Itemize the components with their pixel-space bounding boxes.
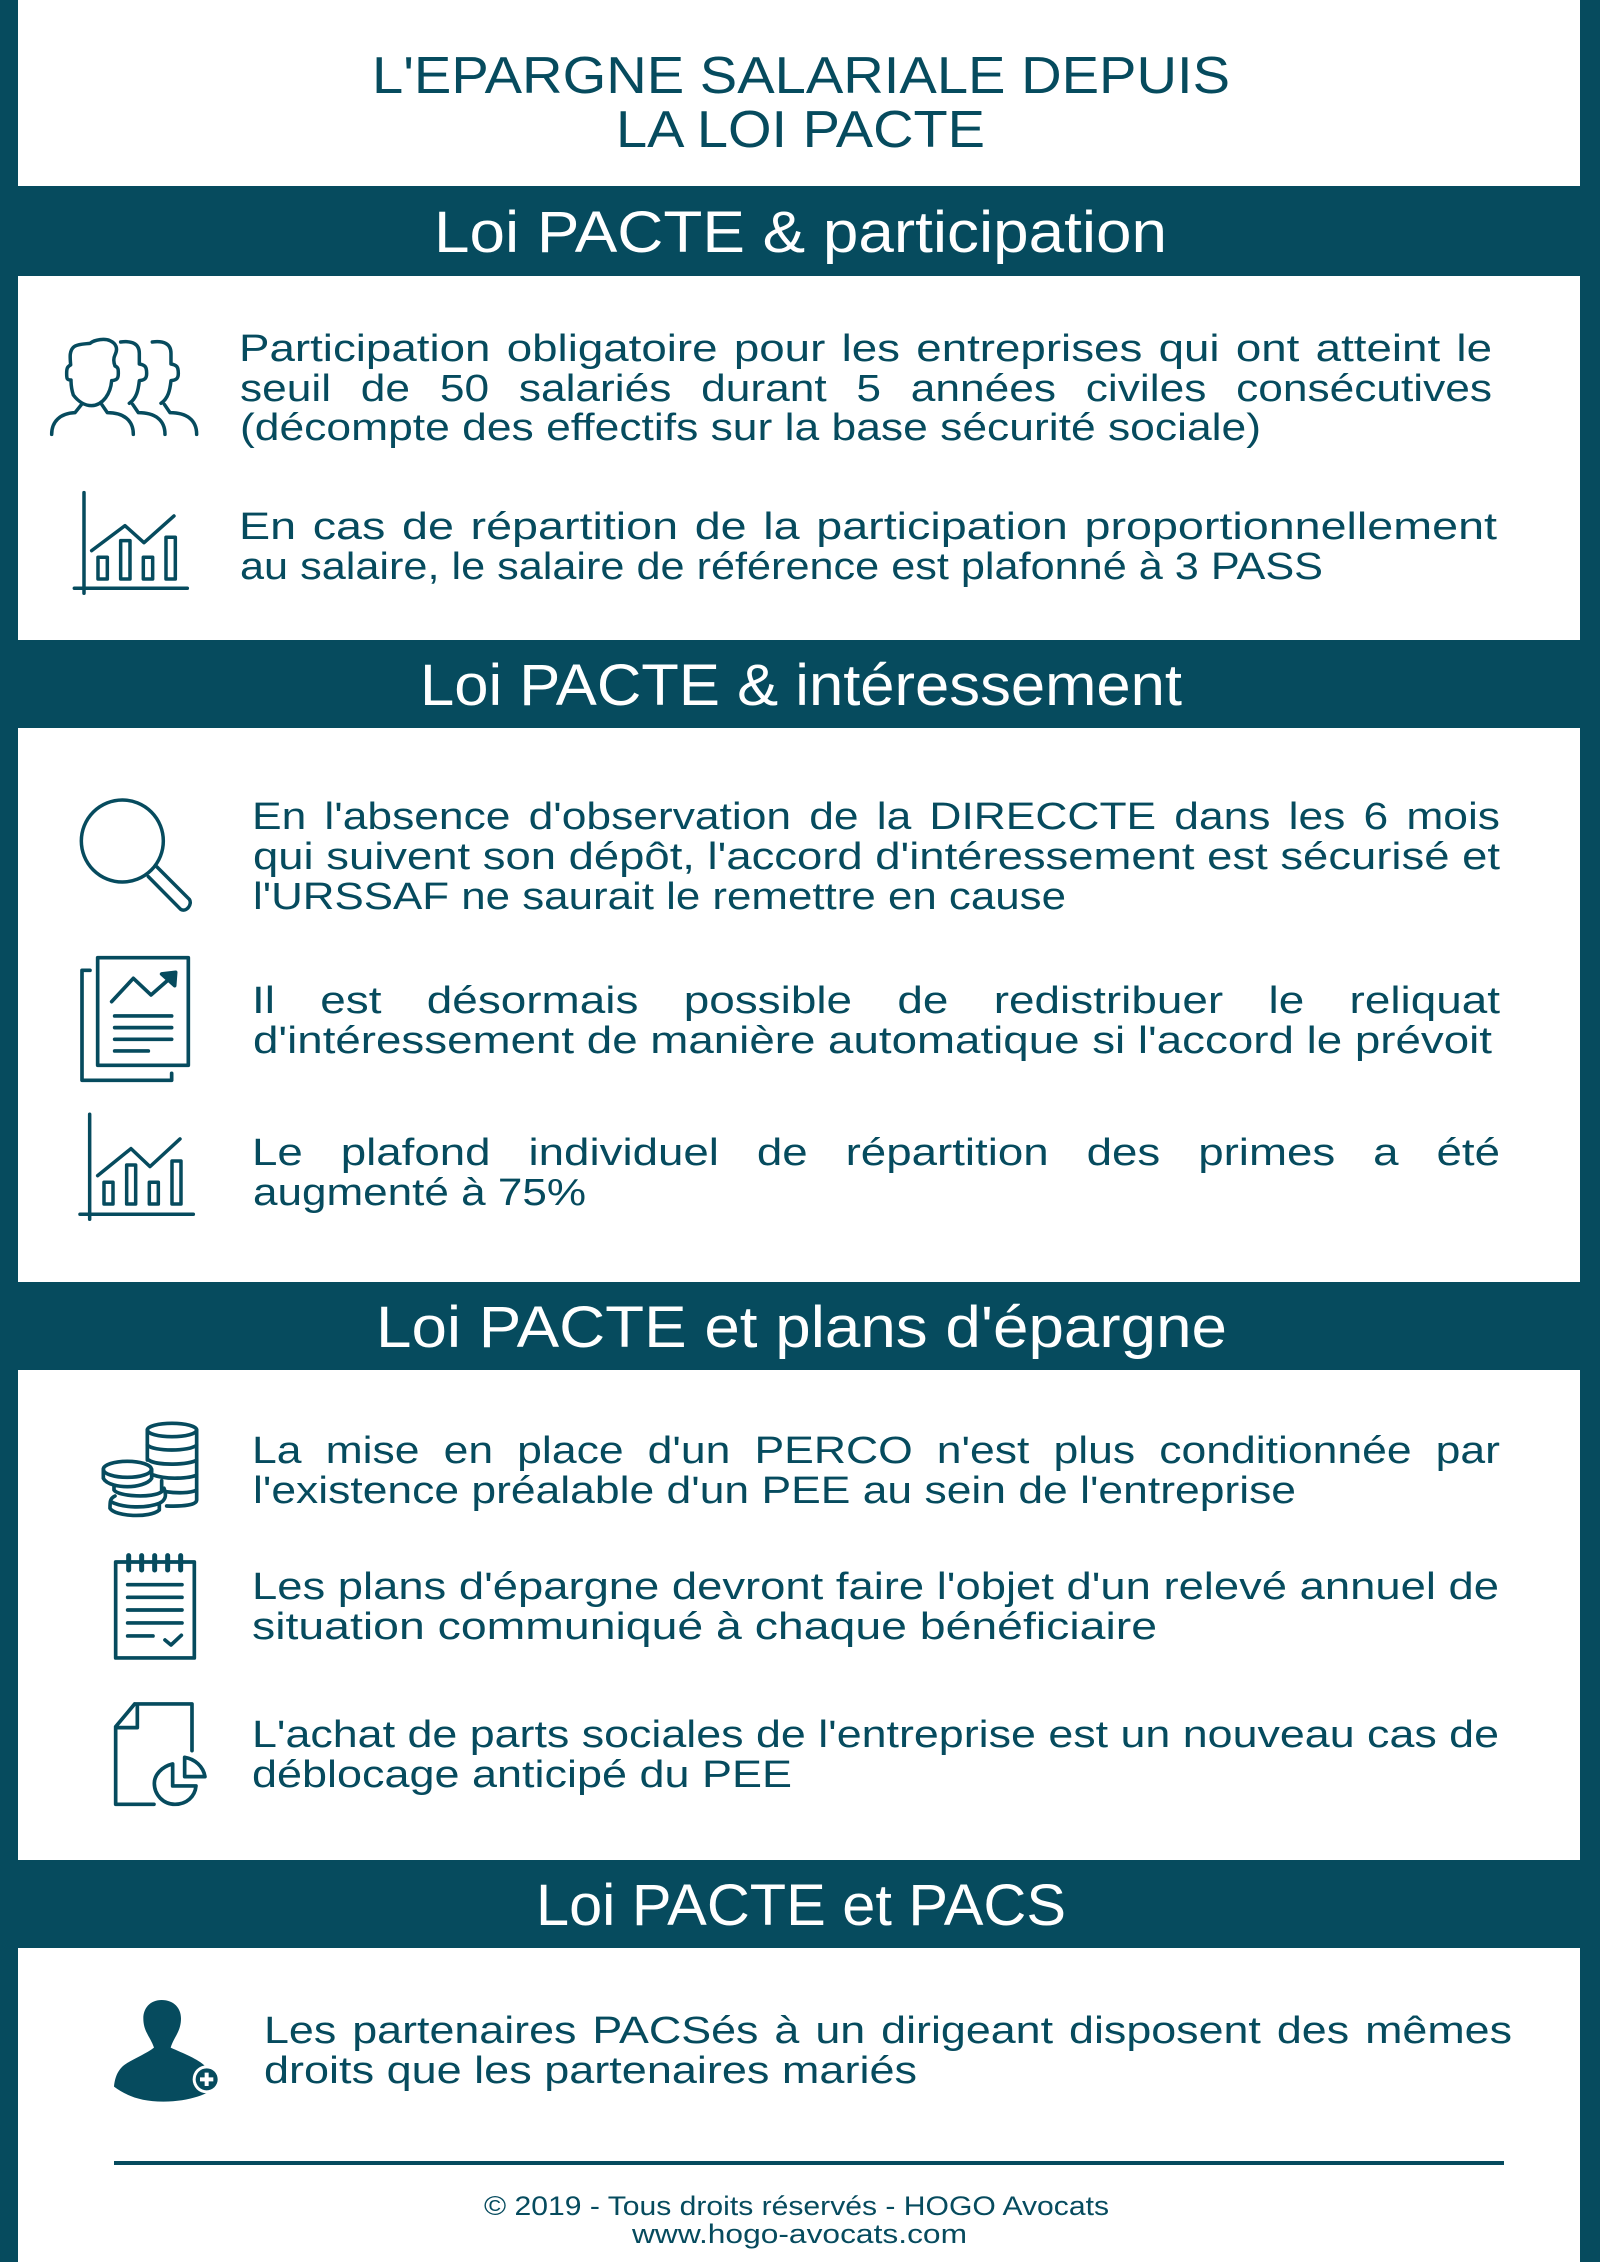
text: relevé annuel — [252, 1566, 1499, 1648]
text: PERCO: l'existence préalable d'un PEE au sein de l'entreprise — [253, 1470, 1296, 1512]
text: relevé annuel: situation communiqué à chaque bénéficiaire — [252, 1606, 1157, 1648]
footer — [484, 2191, 1109, 2249]
icon: notepad — [116, 1556, 194, 1658]
panel: intéressement — [18, 728, 1580, 1282]
footer: www.hogo-avocats.com — [631, 2219, 967, 2249]
text: relevé annuel: Les plans d'épargne devront faire l'objet d'un relevé annuel de — [252, 1566, 1499, 1608]
text: reliquat: d'intéressement de manière automatique si l'accord le prévoit — [253, 1020, 1493, 1062]
icon: bar chart — [74, 493, 187, 593]
panel: plans d'épargne — [18, 1370, 1580, 1860]
text: DIRECCTE: l'URSSAF ne saurait le remettre en cause — [253, 876, 1066, 918]
text: PERCO: La mise en place d'un PERCO n'est plus conditionnée par — [252, 1430, 1500, 1472]
text: plafond individuel — [252, 1132, 1500, 1214]
heading: Loi PACTE et PACS: Loi PACTE et PACS — [536, 1873, 1066, 1938]
panel: PACS — [18, 1948, 1580, 2262]
title: L'EPARGNE SALARIALE DEPUIS — [372, 47, 1230, 105]
text: parts sociales: déblocage anticipé du PEE — [252, 1754, 792, 1796]
text: DIRECCTE: En l'absence d'observation de la DIRECCTE dans les 6 mois — [252, 796, 1500, 838]
text: plafond 3 PASS: au salaire, le salaire de référence est plafonné à 3 PASS — [240, 546, 1323, 588]
text: plafond individuel: augmenté à 75% — [253, 1172, 586, 1214]
title — [372, 47, 1230, 159]
text: participation obligatoire: seuil de 50 salariés durant 5 années civiles consécutives — [240, 368, 1492, 410]
icon: bar chart — [80, 1114, 193, 1219]
heading: Loi PACTE & intéressement: Loi PACTE & intéressement — [420, 653, 1182, 718]
text: participation obligatoire: (décompte des effectifs sur la base sécurité sociale) — [240, 407, 1261, 449]
icon: file with pie chart — [116, 1704, 205, 1804]
icon: person with plus — [114, 2000, 221, 2102]
text: partenaires PACSés: Les partenaires PACSés à un dirigeant disposent des mêmes — [264, 2010, 1512, 2052]
heading: Loi PACTE et plans d'épargne: Loi PACTE et plans d'épargne — [376, 1295, 1227, 1360]
text: partenaires PACSés — [264, 2010, 1512, 2092]
text: DIRECCTE — [252, 796, 1501, 918]
text: plafond 3 PASS — [239, 506, 1498, 588]
text: reliquat: Il est désormais possible de redistribuer le reliquat — [252, 980, 1501, 1022]
icon: coins — [103, 1423, 197, 1515]
heading: Loi PACTE & participation: Loi PACTE & participation — [434, 200, 1167, 265]
text: plafond individuel: Le plafond individuel de répartition des primes a été — [252, 1132, 1500, 1174]
footer: © 2019 - Tous droits réservés - HOGO Avocats — [484, 2191, 1109, 2221]
text: participation obligatoire — [239, 328, 1492, 449]
text: PERCO — [252, 1430, 1500, 1512]
text: DIRECCTE: qui suivent son dépôt, l'accord d'intéressement est sécurisé et — [253, 836, 1501, 878]
panel: participation — [18, 276, 1580, 640]
text: reliquat — [252, 980, 1501, 1062]
icon: magnifier — [81, 800, 190, 910]
text: partenaires PACSés: droits que les partenaires mariés — [264, 2050, 917, 2092]
text: parts sociales: L'achat de parts sociales de l'entreprise est un nouveau cas de — [252, 1714, 1499, 1756]
text: parts sociales — [252, 1714, 1499, 1796]
text: participation obligatoire: Participation obligatoire pour les entreprises qui ont atteint le — [239, 328, 1492, 370]
icon: report document — [82, 958, 188, 1080]
icon: people — [52, 339, 197, 434]
title: LA LOI PACTE — [616, 101, 985, 159]
text: plafond 3 PASS: En cas de répartition de la participation proportionnellement — [239, 506, 1498, 548]
panel: title — [18, 0, 1580, 186]
